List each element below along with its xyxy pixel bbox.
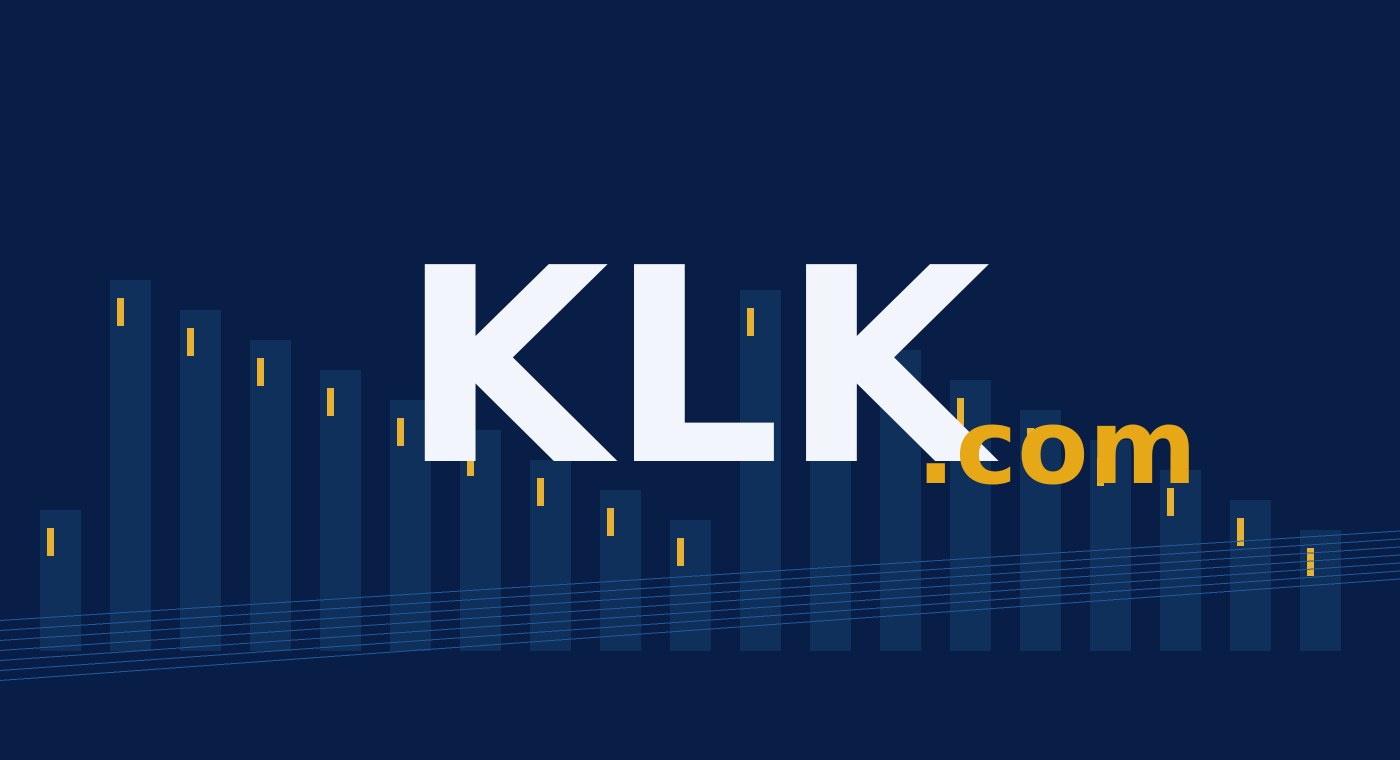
- gold tick marks: [47, 298, 1314, 576]
- wordmark: .com: .com: [916, 386, 1197, 508]
- rising trend lines: [0, 531, 1400, 680]
- bar chart: background bars: [40, 280, 1341, 651]
- wordmark: KLK: KLK: [400, 210, 1001, 525]
